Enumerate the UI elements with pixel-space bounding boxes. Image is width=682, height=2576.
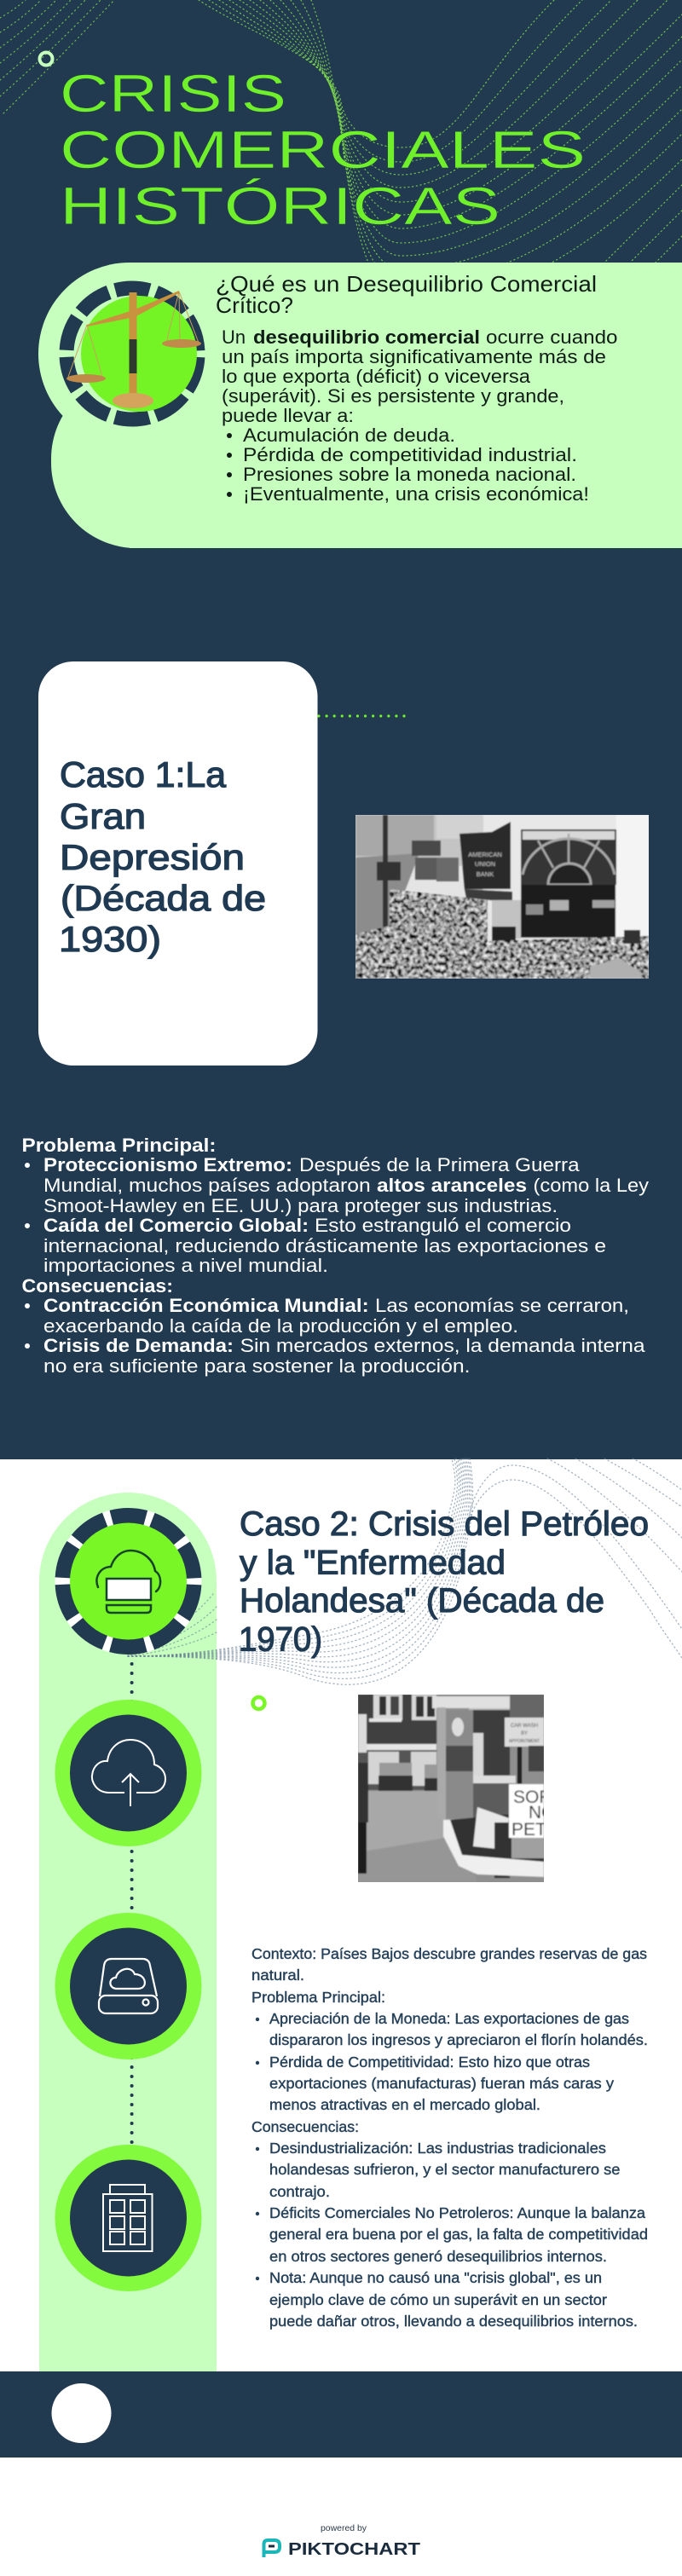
heading: case 2: y la "Enfermedad [240, 1545, 506, 1582]
icon: small pale ring [39, 53, 53, 65]
text block: case 2 context, problem, consequences: Nota: Aunque no causó una "crisis global", es un [269, 2269, 602, 2286]
title: HISTÓRICAS [60, 177, 500, 236]
text block: case 1 problem and consequences: internacional, reduciendo drásticamente las exportaciones e [43, 1235, 606, 1256]
text block: case 1 problem and consequences: Caída del Comercio Global: [43, 1215, 309, 1236]
photo: petrol station with no petrol sign: BY [521, 1731, 528, 1736]
title [60, 65, 586, 236]
text block: definition: desequilibrio comercial [253, 326, 480, 348]
text block: case 2 context, problem, consequences: Pérdida de Competitividad: Esto hizo que otras [269, 2053, 590, 2071]
text block: definition: Un [222, 326, 246, 348]
photo: bank run crowd 1930s [355, 815, 649, 979]
text block: case 1 problem and consequences: Proteccionismo Extremo: [43, 1154, 292, 1175]
photo: petrol station with no petrol sign: NO [529, 1803, 556, 1822]
icon: balance scale on green dial [66, 288, 201, 419]
text block: case 2 context, problem, consequences: Consecuencias: [251, 2118, 359, 2135]
text block: case 1 problem and consequences: Las economías se cerraron, [375, 1295, 629, 1316]
panel: what is a trade imbalance [38, 263, 682, 548]
text block: case 2 context, problem, consequences: holandesas sufrieron, y el sector manufacturero se [269, 2161, 621, 2178]
photo: petrol station with no petrol sign: PETROL [512, 1820, 583, 1840]
text block: case 1 problem and consequences: no era suficiente para sostener la producción. [43, 1355, 471, 1377]
text block: definition: ocurre cuando [486, 326, 617, 348]
heading: case 2: Holandesa" (Década de [240, 1582, 604, 1620]
text block: case 2 context, problem, consequences: general era buena por el gas, la falta de competitividad [269, 2226, 648, 2243]
decorative dotted wave: top centre and right [199, 0, 682, 298]
text block: case 1 problem and consequences: Crisis de Demanda: [43, 1335, 234, 1356]
text block: case 2 context, problem, consequences: Problema Principal: [251, 1989, 385, 2006]
text block: case 1 problem and consequences: Después de la Primera Guerra [299, 1154, 580, 1175]
text block: case 1 problem and consequences: Sin mercados externos, la demanda interna [240, 1335, 645, 1356]
heading: case 1: (Década de [61, 878, 266, 918]
decorative dotted wave: case 2 section [128, 1458, 682, 1684]
piktochart credit: powered by [321, 2524, 367, 2533]
piktochart credit: PIKTOCHART [288, 2539, 421, 2559]
list: effects of imbalance [227, 425, 589, 505]
icon: small green ring [252, 1697, 264, 1709]
text block: case 2 context, problem, consequences [251, 1945, 648, 2330]
photo: bank run crowd 1930s: AMERICAN [468, 851, 502, 858]
text block: definition [222, 326, 617, 426]
list: effects of imbalance: Acumulación de deuda. [243, 425, 455, 446]
photo: bank run crowd 1930s: UNION [475, 860, 495, 868]
photo: petrol station with no petrol sign: APPOINTMENT [509, 1739, 540, 1744]
text block: case 1 problem and consequences: importaciones a nivel mundial. [43, 1255, 328, 1276]
piktochart credit [264, 2524, 421, 2559]
timeline step 4: building icon [55, 2145, 201, 2291]
title: CRISIS [60, 65, 286, 124]
heading: question [216, 271, 597, 318]
heading: question: ¿Qué es un Desequilibrio Comercial [216, 271, 597, 297]
footer band [0, 2371, 682, 2458]
list: effects of imbalance: ¡Eventualmente, una crisis económica! [243, 483, 589, 505]
text block: case 2 context, problem, consequences: exportaciones (manufacturas) fueran más caras y [269, 2075, 614, 2092]
text block: definition: puede llevar a: [222, 405, 354, 426]
list: effects of imbalance: Pérdida de competitividad industrial. [243, 444, 577, 465]
text block: case 2 context, problem, consequences: natural. [251, 1967, 304, 1984]
heading: case 1: Depresión [60, 837, 245, 877]
timeline step 3: cloud drive icon [55, 1913, 201, 2059]
heading: case 1: Gran [60, 796, 146, 836]
text block: definition: un país importa significativamente más de [222, 346, 606, 367]
white circle on footer band [51, 2383, 111, 2443]
photo: petrol station with no petrol sign [358, 1695, 583, 1882]
text block: case 1 problem and consequences: altos aranceles [377, 1175, 527, 1196]
text block: case 2 context, problem, consequences: Déficits Comerciales No Petroleros: Aunque la balanza [269, 2204, 645, 2221]
text block: case 1 problem and consequences: Problema Principal: [22, 1135, 217, 1156]
text block: case 1 problem and consequences [22, 1135, 649, 1377]
text block: case 2 context, problem, consequences: Desindustrialización: Las industrias tradicionales [269, 2140, 606, 2157]
photo: petrol station with no petrol sign: SORRY [513, 1788, 576, 1807]
text block: case 1 problem and consequences: Mundial, muchos países adoptaron [43, 1175, 371, 1196]
heading: case 2 [239, 1505, 649, 1659]
timeline step 2: cloud upload icon [55, 1700, 201, 1846]
timeline step 1: laptop and cloud icon on dial [55, 1508, 201, 1655]
panel background shape [38, 263, 682, 548]
photo: bank run crowd 1930s: BANK [477, 870, 494, 878]
icon: piktochart logo [264, 2540, 280, 2557]
list: effects of imbalance: Presiones sobre la moneda nacional. [243, 464, 576, 485]
text block: case 2 context, problem, consequences: dispararon los ingresos y apreciaron el florín holandés. [269, 2031, 648, 2048]
text block: case 1 problem and consequences: Esto estranguló el comercio [315, 1215, 571, 1236]
text block: case 1 problem and consequences: Consecuencias: [22, 1275, 173, 1297]
heading: case 1: 1930) [59, 919, 161, 959]
text block: case 2 context, problem, consequences: contrajo. [269, 2183, 330, 2200]
heading: case 1 [59, 754, 266, 959]
text block: case 2 context, problem, consequences: ejemplo clave de cómo un superávit en un sector [269, 2291, 607, 2308]
navy upper background [0, 0, 682, 1459]
heading: case 1: Caso 1:La [60, 754, 227, 794]
text block: case 2 context, problem, consequences: Apreciación de la Moneda: Las exportaciones de gas [269, 2010, 629, 2027]
timeline column [39, 1493, 217, 2371]
heading: case 2: 1970) [239, 1621, 322, 1659]
text block: case 2 context, problem, consequences: en otros sectores generó desequilibrios internos. [269, 2248, 607, 2265]
dotted connector [319, 714, 404, 718]
panel: case 1 title card [38, 661, 317, 1066]
text block: definition: lo que exporta (déficit) o viceversa [222, 366, 531, 387]
heading: question: Crítico? [216, 292, 293, 318]
text block: case 1 problem and consequences: (como la Ley [534, 1175, 649, 1196]
text block: definition: (superávit). Si es persistente y grande, [222, 385, 564, 407]
text block: case 1 problem and consequences: Contracción Económica Mundial: [43, 1295, 369, 1316]
title: COMERCIALES [60, 121, 586, 180]
heading: case 2: Caso 2: Crisis del Petróleo [240, 1505, 649, 1543]
text block: case 1 problem and consequences: Smoot-Hawley en EE. UU.) para proteger sus industrias. [43, 1195, 558, 1216]
text block: case 2 context, problem, consequences: menos atractivas en el mercado global. [269, 2096, 540, 2113]
text block: case 2 context, problem, consequences: puede dañar otros, llevando a desequilibrios internos. [269, 2313, 638, 2330]
timeline dotted connector [130, 1664, 134, 2157]
decorative dotted wave: top left [0, 0, 114, 113]
text block: case 1 problem and consequences: exacerbando la caída de la producción y el empleo. [43, 1315, 518, 1337]
text block: case 2 context, problem, consequences: Contexto: Países Bajos descubre grandes reservas de gas [251, 1945, 647, 1962]
photo: petrol station with no petrol sign: CAR WASH [511, 1724, 538, 1729]
